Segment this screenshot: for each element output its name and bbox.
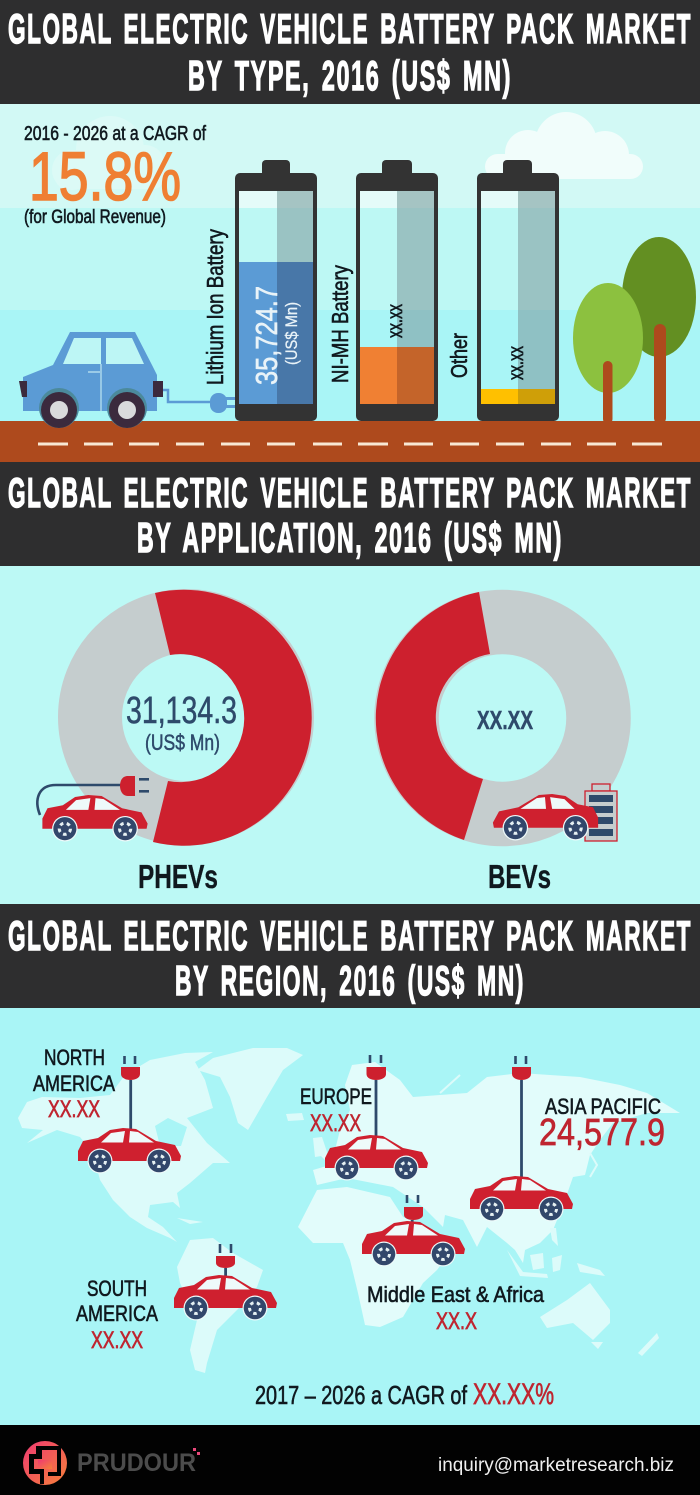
CAGR callout: (for Global Revenue) — [24, 207, 166, 228]
icon: cloud right — [485, 112, 643, 179]
footer — [0, 1425, 700, 1495]
north america marker — [78, 1056, 181, 1174]
icon: prudour logo — [23, 1441, 67, 1485]
battery: lithium ion: (US$ Mn) — [282, 302, 301, 365]
brand name: PRUDOUR — [77, 1449, 196, 1477]
label: asia pacific — [539, 1094, 665, 1154]
label: middle east and africa: XX.X — [436, 1308, 477, 1335]
value: BEVs: XX.XX — [477, 705, 533, 735]
asia pacific marker — [470, 1056, 573, 1222]
panel: battery types scene — [0, 112, 700, 462]
label: north america: NORTH — [44, 1045, 105, 1070]
plug — [216, 1244, 235, 1276]
CAGR callout: 15.8% — [29, 138, 181, 215]
battery: NI-MH — [356, 160, 438, 421]
middle east and africa marker — [362, 1195, 465, 1266]
car — [325, 1135, 428, 1180]
label: north america: XX.XX — [48, 1096, 100, 1123]
header: by application — [0, 462, 700, 566]
regional CAGR callout: XX.XX% — [473, 1378, 554, 1411]
plug — [512, 1056, 531, 1177]
regional CAGR callout: 2017 – 2026 a CAGR of — [255, 1380, 468, 1410]
panel: BEVs donut — [376, 592, 617, 895]
icon: faint cloud left — [52, 116, 165, 190]
icon: plug-in car — [37, 776, 149, 841]
label: NI-MH battery: NI-MH Battery — [327, 265, 353, 383]
donut chart: BEVs — [376, 592, 598, 840]
icon: battery electric car — [493, 784, 617, 841]
panel: world map — [18, 1045, 680, 1411]
label: north america: AMERICA — [33, 1071, 115, 1096]
label: asia pacific: ASIA PACIFIC — [545, 1094, 661, 1119]
label: europe: XX.XX — [310, 1110, 361, 1137]
label: other: Other — [446, 333, 472, 378]
donut chart: PHEVs — [90, 590, 312, 846]
south america marker — [174, 1244, 277, 1320]
label: europe — [300, 1084, 372, 1137]
header: by type — [0, 0, 700, 104]
label: europe: EUROPE — [300, 1084, 372, 1109]
label: south america — [76, 1276, 158, 1354]
CAGR callout: 2016 - 2026 at a CAGR of — [24, 123, 206, 145]
value: PHEVs: (US$ Mn) — [145, 730, 220, 755]
panel: PHEVs donut — [37, 590, 312, 895]
car — [470, 1176, 573, 1222]
car — [362, 1221, 465, 1266]
label: lithium ion battery: Lithium Ion Battery — [202, 229, 228, 385]
plug — [366, 1055, 386, 1136]
label: middle east and africa: Middle East & Africa — [367, 1282, 545, 1307]
label: middle east and africa — [367, 1282, 545, 1335]
value: PHEVs — [126, 690, 237, 755]
europe marker — [325, 1055, 428, 1180]
label: south america: SOUTH — [87, 1276, 147, 1301]
battery: other: xx.xx — [505, 346, 528, 380]
value: PHEVs: 31,134.3 — [126, 690, 237, 732]
battery: other — [477, 160, 559, 421]
plug — [404, 1195, 423, 1228]
plug — [121, 1056, 140, 1129]
battery: lithium ion — [235, 160, 317, 421]
label: south america: AMERICA — [76, 1301, 158, 1326]
label: north america — [33, 1045, 115, 1123]
header: by region — [0, 904, 700, 1008]
road — [0, 421, 700, 462]
label: asia pacific: 24,577.9 — [539, 1112, 665, 1154]
label: BEVs: BEVs — [488, 858, 551, 895]
battery: NI-MH: xx.xx — [384, 304, 407, 338]
car — [174, 1275, 277, 1320]
label: PHEVs: PHEVs — [138, 858, 218, 895]
world map silhouette — [18, 1048, 680, 1373]
CAGR callout — [24, 123, 206, 228]
icon: blue car with plug — [19, 332, 236, 428]
label: south america: XX.XX — [91, 1327, 143, 1354]
contact email: inquiry@marketresearch.biz — [438, 1455, 674, 1476]
car — [78, 1128, 181, 1174]
battery: lithium ion: 35,724.7 — [249, 286, 284, 385]
icon: trees — [573, 237, 696, 424]
